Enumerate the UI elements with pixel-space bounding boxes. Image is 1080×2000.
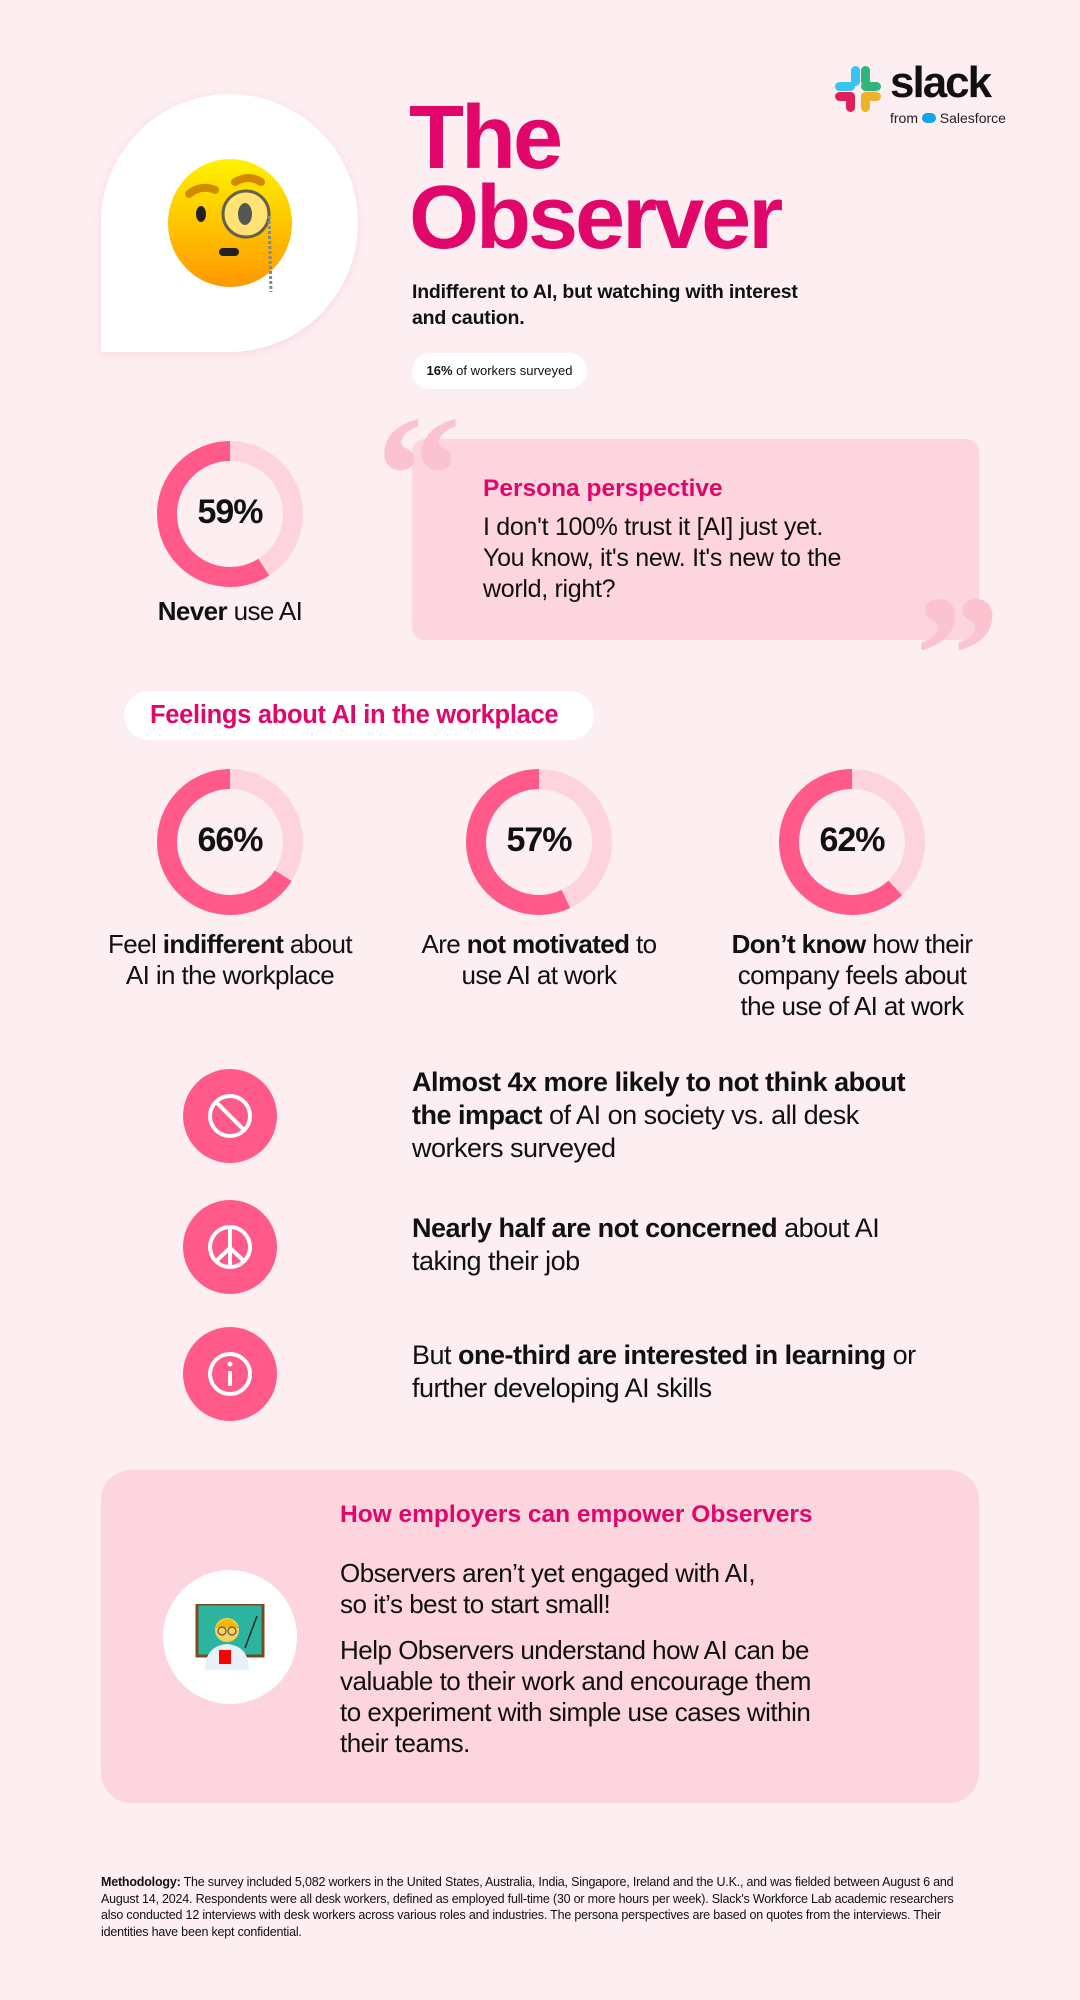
methodology footnote: Methodology: The survey included 5,082 workers in the United States, Australia, India, Singapore, Ireland and the U.K., and was fielded between August 6 and August 14, 2024. Respondents were all desk workers, defined as employed full-time (30 or more hours per week). Slack's Workforce Lab academic researchers also conducted 12 interviews with desk workers across various roles and industries. The persona perspectives are based on quotes from the interviews. Their identities have been kept confidential. (101, 1875, 954, 1938)
fact text: further developing AI skills (412, 1373, 712, 1403)
fact row: society impact (183, 1067, 906, 1163)
quote text: I don't 100% trust it [AI] just yet. (483, 513, 823, 541)
donut: 57%: Are not motivated to (421, 929, 657, 959)
icon: monocle face emoji (168, 159, 292, 292)
donut: 57% (421, 769, 657, 990)
fact text (412, 1213, 879, 1276)
panel: how employers can empower observers: valuable to their work and encourage them (340, 1666, 811, 1696)
donut: 62% (732, 769, 973, 1021)
fact text (412, 1067, 906, 1163)
fact row: one-third interested (183, 1327, 916, 1421)
title: Observer (409, 168, 780, 268)
icon: close quote: ” (915, 561, 1000, 749)
donut: 66%: AI in the workplace (126, 960, 334, 990)
fact text: Nearly half are not concerned about AI (412, 1213, 879, 1243)
slack logo (835, 58, 1006, 126)
body text (340, 1558, 755, 1619)
icon: prohibited (183, 1069, 277, 1163)
quote box (412, 439, 979, 640)
panel: persona perspective quote (376, 381, 1000, 749)
fact text: taking their job (412, 1246, 580, 1276)
body text: Observers aren’t yet engaged with AI, (340, 1558, 755, 1588)
donut: 66% (108, 769, 352, 990)
donut: 62%: the use of AI at work (740, 991, 963, 1021)
title (409, 88, 782, 268)
slack logo: from Salesforce (890, 110, 1006, 126)
donut: 62%: Don’t know how their (732, 929, 972, 959)
fact text: But one-third are interested in learning or (412, 1340, 916, 1370)
pill: workers surveyed: 16% of workers surveyed (427, 363, 572, 378)
donut: 59% never use AI (157, 441, 303, 626)
donut: 66%: Feel indifferent about (108, 929, 352, 959)
emoji bubble (101, 94, 358, 352)
donut: 62%: company feels about (738, 960, 966, 990)
quote text: You know, it's new. It's new to the (483, 544, 841, 572)
slack logo: slack (890, 58, 990, 107)
panel: how employers can empower observers (101, 1470, 979, 1803)
subtitle: Indifferent to AI, but watching with interest (412, 281, 798, 303)
donut: 59% never use AI: Never use AI (158, 596, 302, 626)
panel: how employers can empower observers: their teams. (340, 1728, 470, 1758)
panel: how employers can empower observers: Help Observers understand how AI can be (340, 1635, 809, 1665)
donut: 66%: 66% (197, 821, 263, 859)
pill: workers surveyed (412, 353, 587, 389)
title: The (409, 88, 560, 188)
heading pill: feelings about AI: Feelings about AI in the workplace (150, 701, 558, 729)
subtitle (412, 281, 798, 329)
donut: 57%: 57% (506, 821, 572, 859)
heading: How employers can empower Observers (340, 1501, 812, 1528)
donut: 57%: use AI at work (462, 960, 616, 990)
fact row: not concerned (183, 1200, 879, 1294)
donut: 59% never use AI: 59% (197, 493, 263, 531)
icon: peace (183, 1200, 277, 1294)
fact text: Almost 4x more likely to not think about (412, 1067, 905, 1097)
quote text: world, right? (483, 575, 615, 603)
body text: so it’s best to start small! (340, 1589, 610, 1619)
heading: persona perspective: Persona perspective (483, 475, 723, 502)
donut: 62%: 62% (819, 821, 885, 859)
icon: open quote: “ (376, 381, 461, 569)
panel: how employers can empower observers: to experiment with simple use cases within (340, 1697, 810, 1727)
subtitle: and caution. (412, 307, 524, 329)
fact text: the impact of AI on society vs. all desk (412, 1100, 859, 1130)
icon: teacher emoji (163, 1570, 297, 1704)
fact text (412, 1340, 916, 1403)
heading pill: feelings about AI (124, 691, 594, 740)
quote text (483, 513, 841, 603)
icon: info (183, 1327, 277, 1421)
fact text: workers surveyed (412, 1133, 616, 1163)
